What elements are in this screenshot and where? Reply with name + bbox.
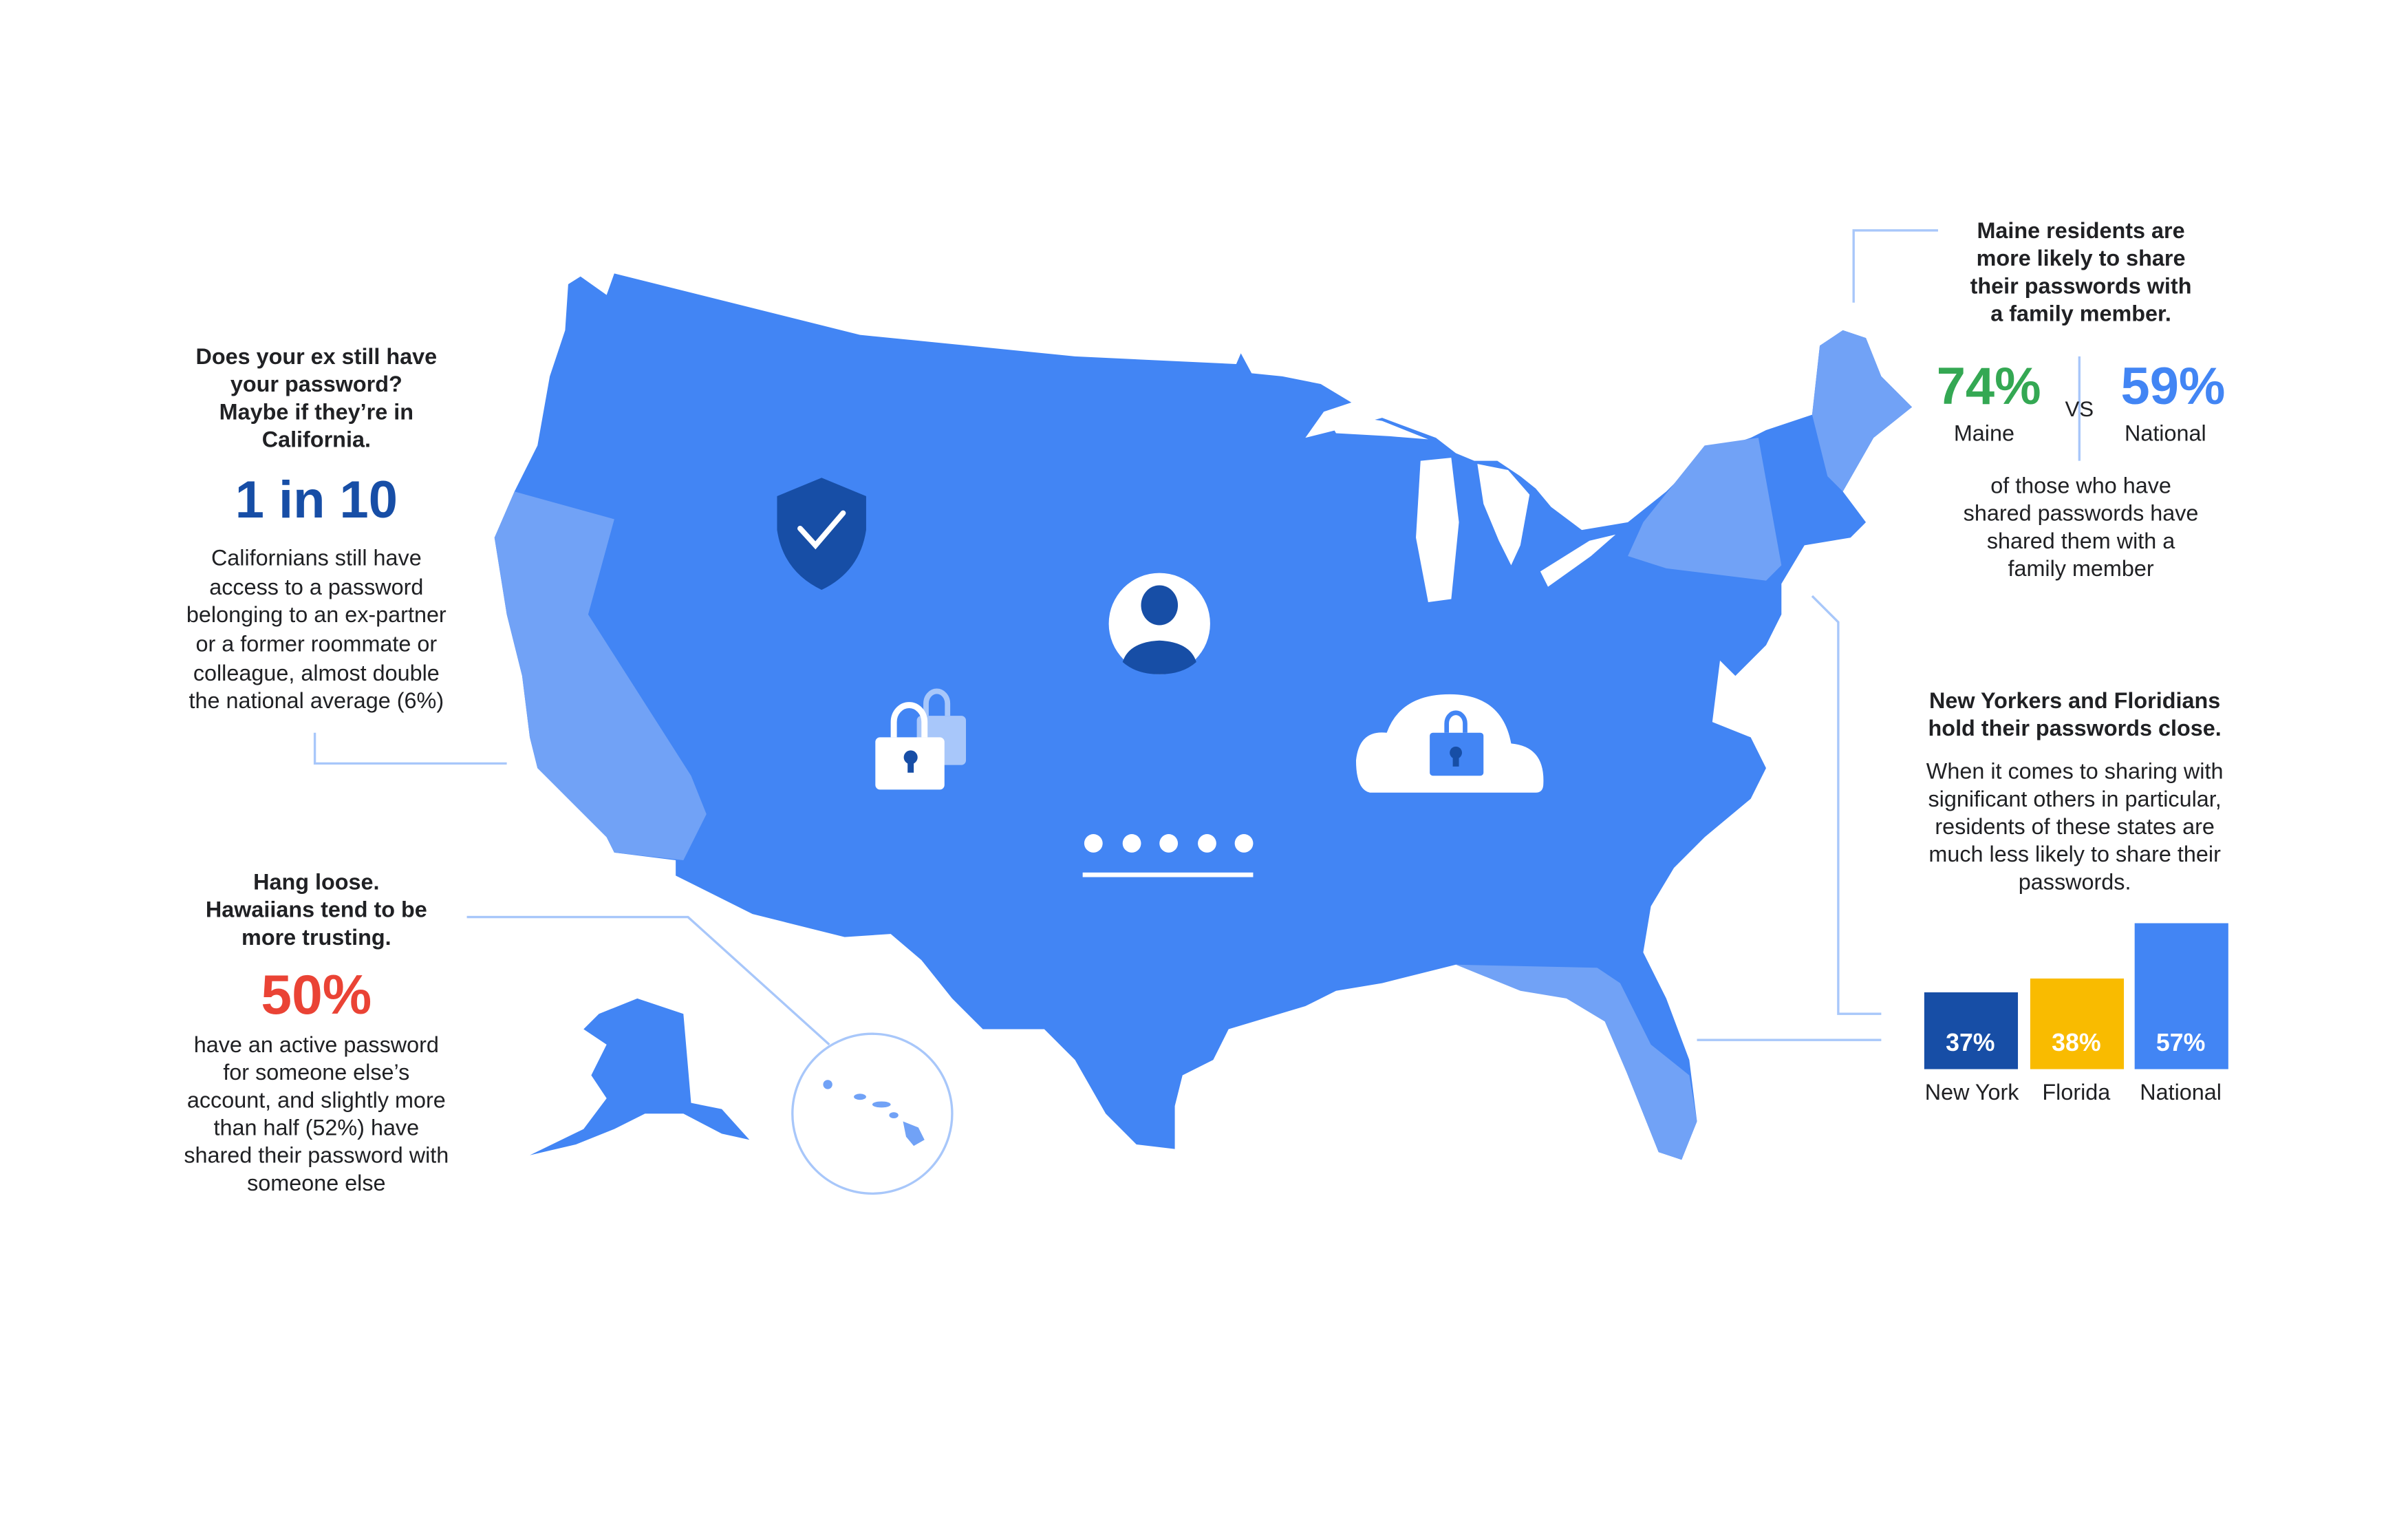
text: Maine: family member: [2008, 556, 2154, 581]
state: New York: [1628, 438, 1781, 581]
text: Hawaii: [184, 869, 449, 1195]
text: California: colleague, almost double: [193, 661, 440, 685]
text: Maine: their passwords with: [1970, 273, 2191, 298]
text: Maine: [1937, 218, 2225, 581]
map: Hawaii circle: [793, 1034, 952, 1193]
text: California: access to a password: [209, 575, 423, 599]
state: Maine: [1812, 330, 1912, 491]
text: California: or a former roommate or: [195, 631, 437, 656]
text: New York and Florida: When it comes to sharing with: [1926, 759, 2223, 784]
text: Hawaii: someone else: [247, 1171, 386, 1195]
text: Hawaii: have an active password: [194, 1032, 439, 1057]
map: Alaska: [530, 999, 749, 1155]
text: California: Maybe if they’re in: [219, 399, 413, 424]
icon: shield: [777, 478, 866, 590]
text: Hawaii: Hang loose.: [253, 869, 380, 894]
text: New York and Florida: much less likely to share their: [1928, 842, 2221, 866]
bar chart: 57%: [2156, 1029, 2205, 1056]
text: New York and Florida: [1926, 688, 2223, 894]
state: Florida: [1456, 965, 1697, 1160]
state: California: [495, 491, 707, 860]
text: Hawaii: shared their password with: [184, 1143, 449, 1168]
text: New York and Florida: significant others in particular,: [1928, 787, 2222, 811]
text: Hawaii: Hawaiians tend to be: [206, 897, 427, 922]
icon: user: [1109, 573, 1210, 674]
text: Hawaii: more trusting.: [241, 925, 391, 950]
icon: locks: [875, 691, 966, 789]
map: US: [495, 273, 1912, 1160]
text: Maine: a family member.: [1990, 301, 2171, 326]
text: New York and Florida: hold their passwords close.: [1928, 716, 2222, 740]
text: California: belonging to an ex-partner: [186, 602, 447, 627]
bar chart: [1924, 924, 2228, 1105]
text: Maine: VS: [2065, 397, 2094, 421]
text: New York and Florida: New Yorkers and Floridians: [1929, 688, 2220, 713]
text: New York and Florida: residents of these states are: [1935, 814, 2215, 839]
bar chart: Florida: [2042, 1080, 2110, 1105]
text: Maine: more likely to share: [1977, 246, 2186, 270]
bar chart: 38%: [2052, 1029, 2101, 1056]
text: New York and Florida: passwords.: [2019, 869, 2131, 894]
text: California: [186, 344, 447, 713]
bar chart: 37%: [1946, 1029, 1995, 1056]
text: California: your password?: [230, 372, 402, 396]
text: Maine: shared them with a: [1987, 529, 2175, 553]
text: Hawaii: account, and slightly more: [187, 1087, 446, 1112]
connector lines: [315, 231, 2079, 1045]
text: California: 1 in 10: [235, 471, 398, 529]
text: California: California.: [262, 427, 371, 452]
text: Hawaii: 50%: [261, 964, 372, 1026]
bar chart: National: [2140, 1080, 2222, 1105]
text: Maine: Maine: [1954, 421, 2014, 446]
icon: password dots: [1083, 834, 1253, 877]
text: Hawaii: than half (52%) have: [214, 1116, 419, 1140]
icon: cloud lock: [1356, 694, 1543, 793]
text: California: Does your ex still have: [195, 344, 437, 369]
bar chart: New York: [1925, 1080, 2019, 1105]
text: Maine: 59%: [2121, 357, 2225, 416]
text: California: the national average (6%): [189, 688, 444, 713]
text: Hawaii: for someone else’s: [223, 1060, 409, 1085]
text: California: Californians still have: [211, 545, 422, 570]
text: Maine: shared passwords have: [1964, 501, 2198, 526]
text: Maine: 74%: [1937, 357, 2041, 416]
text: Maine: of those who have: [1990, 473, 2171, 498]
text: Maine: National: [2125, 421, 2206, 446]
text: Maine: Maine residents are: [1977, 218, 2185, 243]
